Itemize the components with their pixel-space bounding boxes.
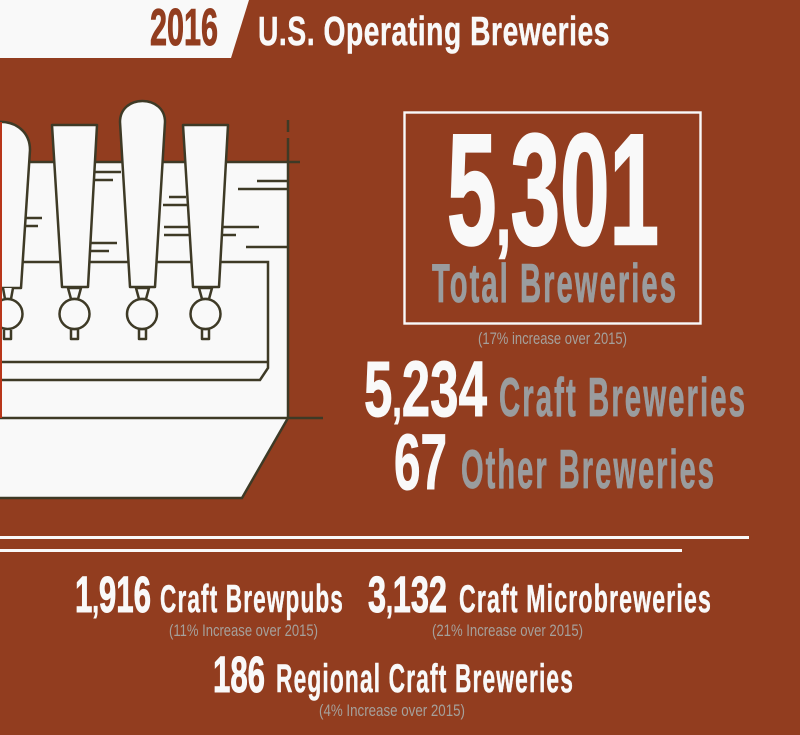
tap 4 <box>183 125 228 339</box>
header banner <box>0 0 610 58</box>
total number: 5,301 <box>447 102 659 278</box>
craft microbreweries stat: (21% Increase over 2015) <box>432 621 583 640</box>
icon: beer tap bar <box>0 101 323 498</box>
total breweries box <box>404 102 700 324</box>
craft brewpubs stat: 1,916 <box>75 566 151 623</box>
tap 2 <box>52 125 97 339</box>
red edge stripe <box>0 122 2 418</box>
craft microbreweries stat <box>368 566 712 640</box>
other breweries stat: 67 <box>394 417 447 506</box>
total increase note: (17% increase over 2015) <box>478 329 627 348</box>
box outline <box>404 112 700 324</box>
regional craft breweries stat: 186 <box>213 646 265 703</box>
craft microbreweries stat: 3,132 <box>368 566 447 623</box>
regional craft breweries stat <box>213 646 574 720</box>
craft brewpubs stat: Craft Brewpubs <box>160 578 344 621</box>
tap 3 <box>120 101 165 339</box>
craft brewpubs stat: (11% Increase over 2015) <box>169 621 318 640</box>
year tab <box>0 0 249 58</box>
craft breweries stat <box>364 344 747 433</box>
divider lines <box>0 536 749 552</box>
title: U.S. Operating Breweries <box>258 8 610 54</box>
regional craft breweries stat: (4% Increase over 2015) <box>319 701 465 720</box>
regional craft breweries stat: Regional Craft Breweries <box>276 657 574 701</box>
bar body <box>0 120 323 498</box>
craft brewpubs stat <box>75 566 344 640</box>
year: 2016 <box>150 0 218 57</box>
tap 1 <box>0 122 30 339</box>
other breweries stat <box>394 417 716 506</box>
craft breweries stat: 5,234 <box>364 344 487 433</box>
